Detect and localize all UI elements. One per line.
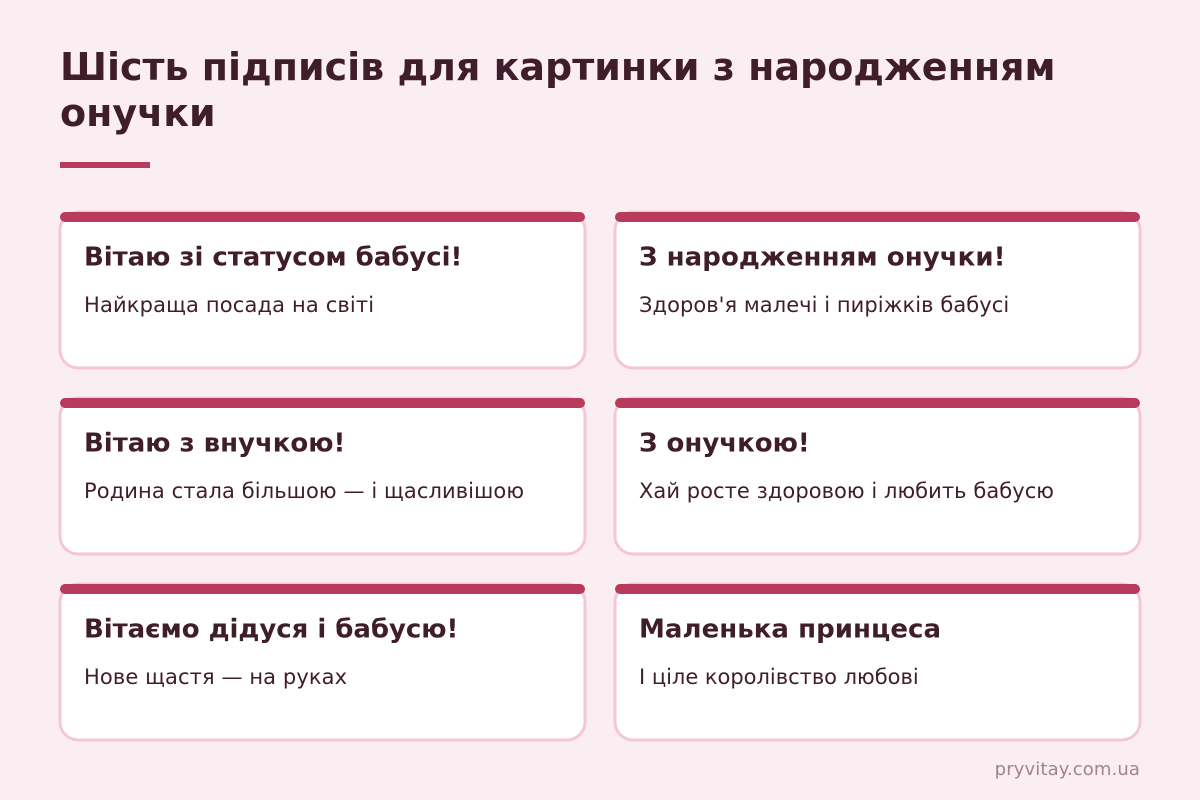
panel: card 4: Хай росте здоровою і любить бабусю [639, 479, 1054, 503]
panel: card 2 [615, 212, 1140, 368]
panel: card 5: Нове щастя — на руках [84, 665, 347, 689]
panel: card 6 [615, 584, 1140, 740]
panel: card 3: Родина стала більшою — і щасливішою [84, 479, 524, 503]
title: Шість підписів для картинки з народженням [60, 45, 1056, 89]
panel: card 4: З онучкою! [639, 428, 810, 458]
title underline accent [60, 162, 150, 168]
title [60, 45, 1056, 135]
panel: card 3 [60, 398, 585, 554]
footer source: pryvitay.com.ua [995, 759, 1140, 780]
panel: card 1 [60, 212, 585, 368]
panel: card 3: Вітаю з внучкою! [84, 428, 345, 458]
panel: card 5: Вітаємо дідуся і бабусю! [84, 614, 458, 644]
panel: card 4 [615, 398, 1140, 554]
title: онучки [60, 91, 216, 135]
panel: card 1: Вітаю зі статусом бабусі! [84, 242, 462, 272]
panel: card 2: З народженням онучки! [639, 242, 1006, 272]
panel: card 6: Маленька принцеса [639, 614, 941, 644]
panel: card 6: І ціле королівство любові [639, 665, 919, 689]
panel: card 2: Здоров'я малечі і пиріжків бабусі [639, 293, 1009, 317]
panel: card 1: Найкраща посада на світі [84, 293, 374, 317]
panel: card 5 [60, 584, 585, 740]
